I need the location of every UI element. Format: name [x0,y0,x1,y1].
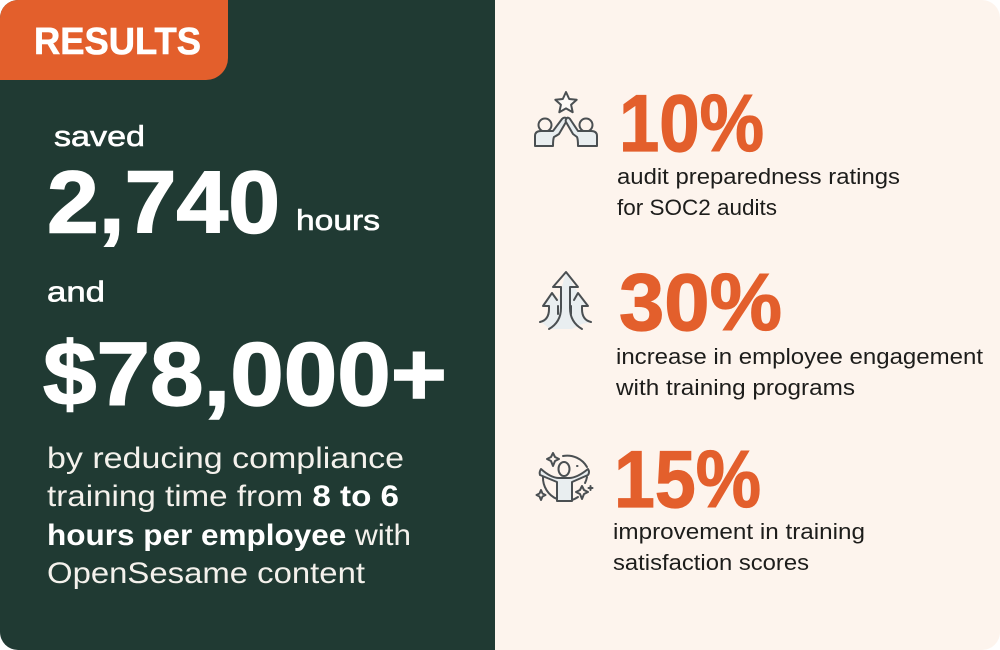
text: saved: saved [54,121,145,153]
stat: 30%: with training programs [615,375,855,400]
stat: 10%: for SOC2 audits [617,195,777,220]
text: description: OpenSesame content [47,557,366,590]
stat: 15%: satisfaction scores [613,550,809,575]
panel: right background [440,0,1000,650]
stat: 15% [613,435,865,575]
icon: person with sparkles [536,453,592,501]
stat: 30%: 30% [619,258,782,348]
badge: results [0,0,228,80]
stat: 2,740 hours: 2,740 [47,152,280,252]
stat: $78,000+: $78,000+ [43,325,447,425]
stat: 10%: 10% [619,79,764,169]
text: description: training time from 8 to 6 [47,480,399,513]
stat: 30% [615,258,983,400]
text: and: and [47,276,105,308]
stat: 10% [617,79,900,220]
stat: 30%: increase in employee engagement [616,344,983,369]
text: description: hours per employee with [47,519,411,552]
text: description [47,442,411,590]
stat: 2,740 hours: hours [296,205,380,237]
icon: high five with star [535,92,597,146]
stat: 10%: audit preparedness ratings [617,164,900,189]
stat: 2,740 hours [47,152,380,252]
stat: 15%: 15% [614,435,761,525]
icon: rising arrows [540,272,591,329]
badge: results: RESULTS [34,21,201,63]
stat: 15%: improvement in training [613,519,865,544]
panel: left results [0,0,495,650]
text: description: by reducing compliance [47,442,404,475]
